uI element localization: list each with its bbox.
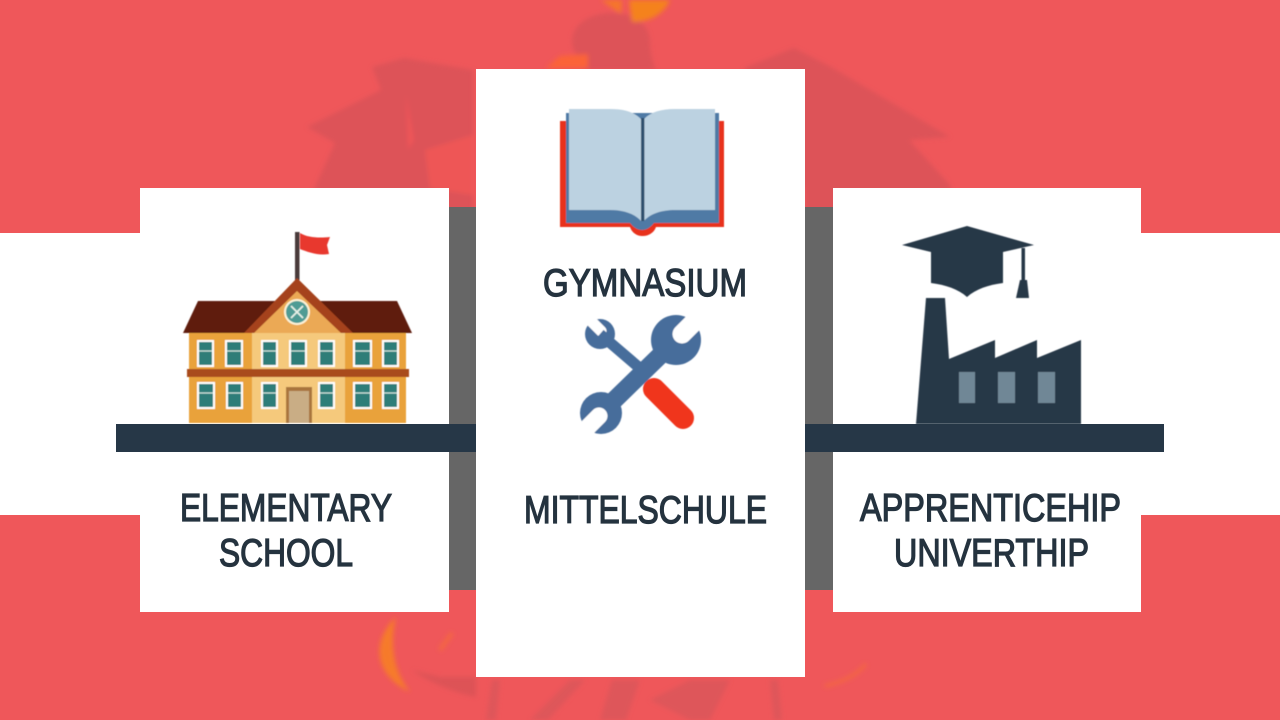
background: eagle emblem top	[294, 0, 960, 233]
label: mittelschule: MITTELSCHULE	[524, 489, 767, 532]
panel: elementary school	[140, 188, 449, 612]
label: gymnasium: GYMNASIUM	[543, 262, 747, 305]
icon: open book	[560, 109, 724, 236]
label: apprenticeship university: APPRENTICEHIP	[860, 487, 1121, 530]
panel: gymnasium and mittelschule	[476, 69, 805, 677]
label: elementary school: SCHOOL	[219, 532, 353, 575]
label: apprenticeship university: UNIVERTHIP	[894, 532, 1089, 575]
shelf bar: right	[805, 424, 1164, 452]
background: eagle emblem bottom	[379, 617, 866, 720]
label: elementary school: ELEMENTARY	[180, 487, 392, 530]
icon: school building	[183, 232, 412, 423]
panel: apprenticeship and university	[833, 188, 1141, 612]
icon: graduation cap	[902, 226, 1034, 298]
icon: crossed wrench and screwdriver	[580, 312, 704, 435]
shelf bar: left	[116, 424, 476, 452]
connector: right gray	[805, 207, 833, 590]
icon: factory	[916, 298, 1081, 424]
label: apprenticeship university	[860, 487, 1121, 575]
label: elementary school	[180, 487, 392, 575]
white band	[0, 233, 1280, 515]
connector: left gray	[449, 207, 476, 590]
